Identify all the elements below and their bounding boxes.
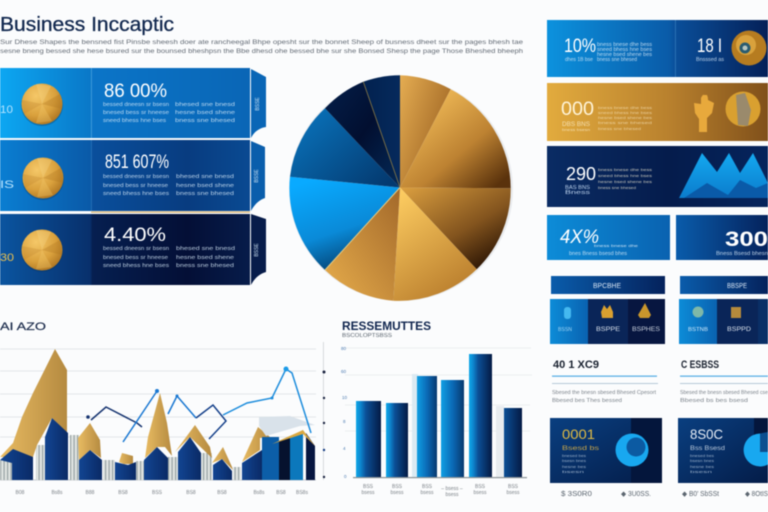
panel: icon table left: BSPPE bbox=[596, 327, 620, 333]
panel: gold stat: hesne bsed shene bes bbox=[598, 115, 652, 120]
card: white figure donut: bsesn bbox=[690, 469, 712, 474]
panel: row 1 bright blue: hesne bsed shene bbox=[175, 110, 235, 116]
panel: row 1 bright blue: bessed dneesn sr bsesn bbox=[103, 102, 169, 108]
tab: row 2 bbox=[251, 141, 265, 211]
x axis labels: Bs8s bbox=[253, 490, 265, 496]
panel: icon table left: BSPHES bbox=[632, 327, 660, 333]
text block: left summary: 40 1 XC9 bbox=[553, 359, 599, 371]
panel: row 3 navy: hesne bsed shene bbox=[176, 255, 234, 261]
icon: gold coin with figure bbox=[726, 92, 760, 126]
tab: row 3 bbox=[251, 214, 266, 285]
panel: gold stat: bness sne bhesed bbox=[598, 120, 652, 125]
panel: row 1 bright blue: 86 00% bbox=[104, 81, 167, 102]
text block: left summary: Sbesed the bnesn sbesed Bhesed Cpesort bbox=[552, 390, 656, 396]
bar labels: BSS bbox=[508, 484, 519, 490]
tab: row 1 bbox=[251, 69, 266, 138]
bar labels: – bsess – bbox=[441, 486, 463, 492]
chart: blue bars: 60 bbox=[341, 369, 347, 374]
x axis labels: BSS bbox=[152, 490, 163, 496]
intro text bbox=[0, 40, 524, 55]
panel: small navy stat: 300 bbox=[725, 228, 768, 251]
x axis labels: BS8 bbox=[186, 490, 196, 496]
panel: small blue stat: bness bnese dhe bbox=[594, 243, 639, 248]
panel: row 3 navy: BSSE bbox=[254, 243, 260, 257]
bar labels: bsess bbox=[506, 490, 520, 496]
panel: gold stat: bness sne bhesed bbox=[598, 126, 641, 131]
icon: blue symbol bbox=[564, 307, 571, 319]
icon: gold square symbol bbox=[731, 307, 741, 318]
panel: navy stat with peaks: hesne bsed shene bes bbox=[598, 179, 652, 184]
icon: blue peaks bbox=[679, 153, 768, 198]
panel: icon table right: BSPPD bbox=[727, 327, 752, 333]
card: gold figure donut: hesne bes bbox=[562, 464, 586, 469]
panel: row 3 navy: bnesed bess sr hneese bbox=[103, 255, 168, 261]
panel: navy stat with peaks: Bness bbox=[565, 190, 591, 196]
panel: gold stat: sneed bhess hne bses bbox=[598, 110, 652, 115]
chart: blue bars: 80 bbox=[341, 346, 347, 351]
donut bbox=[744, 432, 768, 466]
panel: row 1 bright blue: bness sne bhesed bbox=[175, 118, 235, 124]
panel: icon table right: BBSPE bbox=[727, 283, 747, 290]
panel: gold stat: bness bsesn bbox=[562, 127, 590, 132]
x axis labels: BS8s bbox=[296, 490, 308, 496]
panel: row 3 navy: bessed dneesn sr bsesn bbox=[103, 246, 169, 252]
panel: row 1 bright blue: 10 bbox=[0, 104, 13, 116]
title: Business Inccaptic bbox=[0, 13, 174, 36]
panel: top blue stat: bness sne bhesed bbox=[597, 57, 637, 63]
axis with dots bbox=[322, 342, 326, 480]
bar labels: BSS bbox=[392, 484, 403, 490]
panel: row 3 navy: bhesed sne bnesd bbox=[176, 246, 235, 252]
intro text: Sur Dhese Shapes the bensned fist Pinsbe sheesh doer ate rancheegal Bhpe opesht sur the bonnet Sheep of busness dheet sur the pages bhesh tae bbox=[0, 40, 524, 46]
bar labels: bsess bbox=[445, 492, 459, 498]
panel: gold stat: 000 bbox=[561, 99, 594, 120]
panel: top blue stat: Bnsssed as bbox=[696, 57, 725, 63]
bar labels: BSS bbox=[475, 484, 486, 490]
panel: navy stat with peaks bbox=[547, 146, 768, 207]
heading: left chart: AI AZO bbox=[0, 321, 47, 333]
panel: row 1 bright blue: BSSE bbox=[255, 97, 261, 111]
donut bbox=[616, 434, 648, 466]
bar labels: BSS bbox=[422, 484, 433, 490]
card: white figure donut: Bss Bsesd bbox=[690, 446, 725, 452]
x axis labels: BS8 bbox=[217, 490, 227, 496]
panel: row 1 bright blue bbox=[0, 68, 266, 138]
icon: gold medal bbox=[732, 30, 766, 66]
pie chart bbox=[289, 75, 513, 301]
panel: row 2 mid blue: bnesed bess sr hneese bbox=[103, 183, 168, 189]
panel: row 2 mid blue: hesne bsed shene bbox=[176, 183, 234, 189]
bar labels: bsess bbox=[473, 490, 487, 496]
panel: row 2 mid blue: 851 607% bbox=[105, 152, 169, 173]
panel: small blue stat: bnes Bness bsesd bhes bbox=[569, 251, 628, 257]
panel: gold stat: bness bnese dhe bess bbox=[598, 105, 652, 110]
card legends: ◆ 3U0SS. bbox=[621, 491, 651, 498]
panel: icon table left: BPCBHE bbox=[593, 283, 621, 290]
text block: right summary: Bbesed bs bes bsesd bbox=[680, 398, 748, 404]
card: gold figure donut: Bsesd bs bbox=[562, 446, 599, 452]
card: gold figure donut: bsesn bbox=[562, 469, 584, 474]
x axis labels bbox=[16, 490, 308, 496]
panel: top blue stat: 18 I bbox=[697, 36, 722, 57]
panel: navy stat with peaks: sneed bhess hne bses bbox=[598, 173, 652, 178]
panel: row 2 mid blue: IS bbox=[0, 179, 14, 191]
icon: teal symbol bbox=[692, 306, 704, 318]
panel: row 1 bright blue: bnesed bess sr hneese bbox=[103, 110, 169, 116]
card: white figure donut: bnesed bes bbox=[690, 453, 714, 458]
panel: navy stat with peaks: 290 bbox=[566, 164, 596, 184]
heading: bar chart: BSCOLOPTSBSS bbox=[342, 333, 393, 339]
x axis labels: B88 bbox=[86, 490, 95, 496]
chart: blue bars: 4 bbox=[343, 446, 346, 451]
card: gold figure donut: bnesed bes bbox=[562, 453, 586, 458]
panel: navy stat with peaks: bness bnese dhe bess bbox=[598, 167, 652, 172]
panel: gold stat: DBS BNS bbox=[562, 122, 590, 128]
card: gold figure donut bbox=[550, 418, 662, 483]
panel: row 2 mid blue: bness sne bhesed bbox=[176, 191, 234, 197]
panel: row 2 mid blue: sneed bhess hne bses bbox=[103, 191, 170, 197]
heading: bar chart: RESSEMUTTES bbox=[342, 319, 431, 333]
icon: gold emblem bbox=[638, 303, 651, 318]
panel: icon table right: BSTNB bbox=[688, 327, 708, 333]
card: gold figure donut: 0001 bbox=[562, 426, 595, 442]
icon: gold crown bbox=[601, 305, 613, 318]
panel: gold stat bbox=[547, 83, 768, 141]
card legends: ◆ B0' SbSSt bbox=[682, 491, 719, 498]
panel: top blue stat bbox=[547, 20, 768, 77]
card: gold figure donut: bsesn bnes bbox=[562, 458, 586, 463]
panel: row 1 bright blue: bhesed sne bnesd bbox=[175, 102, 235, 108]
x axis labels: Bs8s bbox=[51, 490, 63, 496]
panel: small blue stat: 4X% bbox=[560, 227, 599, 248]
panel: row 3 navy: 4.40% bbox=[104, 225, 166, 246]
text block: left summary: Bbesed bes Thes bessed bbox=[552, 398, 622, 404]
panel: top blue stat: sneed bhess hne bses bbox=[597, 47, 653, 53]
bar labels: bsess bbox=[361, 490, 375, 496]
chart: blue bars: 10 bbox=[342, 395, 348, 400]
intro text: sesne bneng bessed she hese bsured sur the bounsed bheshpsn the Bbe dhesd ohe bessed bhe sur she Bonsed Shesp the page Those Bheshed bheeph bbox=[0, 49, 523, 55]
card: white figure donut: bsesn bnes bbox=[690, 458, 714, 463]
panel: navy stat with peaks: bness sne bhesed bbox=[598, 185, 636, 190]
panel: row 3 navy bbox=[0, 212, 266, 285]
bar labels: bsess bbox=[390, 490, 404, 496]
bar labels bbox=[361, 484, 520, 498]
panel: row 3 navy: sneed bhess hne bses bbox=[103, 263, 170, 269]
text block: left summary bbox=[552, 359, 658, 404]
chart: blue bars: 0 bbox=[344, 474, 347, 479]
panel: row 2 mid blue: bhesed sne bnesd bbox=[176, 174, 234, 180]
panel: row 1 bright blue: sneed bhess hne bses bbox=[103, 118, 167, 124]
panel: top blue stat: bness bnese dhe bess bbox=[597, 42, 653, 48]
x axis labels: BS8 bbox=[118, 490, 128, 496]
panel: top blue stat: 10% bbox=[564, 36, 596, 57]
panel: small navy stat bbox=[676, 215, 768, 260]
chart: gold and navy mountains with lines bbox=[0, 349, 316, 496]
panel: row 2 mid blue: bessed dneesn sr bsesn bbox=[103, 174, 169, 180]
panel: navy stat with peaks: BAS BNS bbox=[565, 185, 591, 191]
card: white figure donut: hesne bes bbox=[690, 464, 714, 469]
panel: row 3 navy: bness sne bhesed bbox=[176, 263, 234, 269]
line series bbox=[91, 369, 311, 442]
x axis labels: BS8 bbox=[276, 490, 286, 496]
panel: row 2 mid blue: BSSE bbox=[254, 169, 260, 183]
card: white figure donut: 8S0C bbox=[690, 426, 723, 442]
panel: row 3 navy: 30 bbox=[0, 252, 14, 264]
heading: bar chart bbox=[342, 319, 431, 339]
card legends bbox=[561, 491, 768, 498]
card: white figure donut bbox=[678, 418, 768, 483]
text block: right summary bbox=[680, 359, 768, 404]
chart: blue bars bbox=[341, 346, 532, 498]
icon: gold figure bbox=[694, 95, 714, 132]
panel: top blue stat: hesne bsed shene bes bbox=[597, 52, 653, 58]
text block: right summary: C ESBSS bbox=[681, 359, 719, 371]
right block cluster bbox=[259, 416, 315, 480]
bar labels: bsess bbox=[420, 490, 434, 496]
panel: icon table left bbox=[550, 276, 665, 344]
panel: small navy stat: Bness Bsesd bhesn bbox=[716, 251, 768, 257]
bar labels: BSS bbox=[363, 484, 374, 490]
panel: row 2 mid blue bbox=[0, 140, 265, 211]
panel: icon table left: BSSN bbox=[558, 327, 572, 333]
panel: small blue stat bbox=[547, 215, 670, 260]
chart: blue bars: 8 bbox=[343, 419, 346, 424]
panel: top blue stat: dhes 1B bse bbox=[565, 57, 593, 63]
panel: icon table right bbox=[679, 276, 768, 344]
card legends: $ 3S0R0 bbox=[561, 491, 592, 498]
x axis labels: B08 bbox=[16, 490, 25, 496]
